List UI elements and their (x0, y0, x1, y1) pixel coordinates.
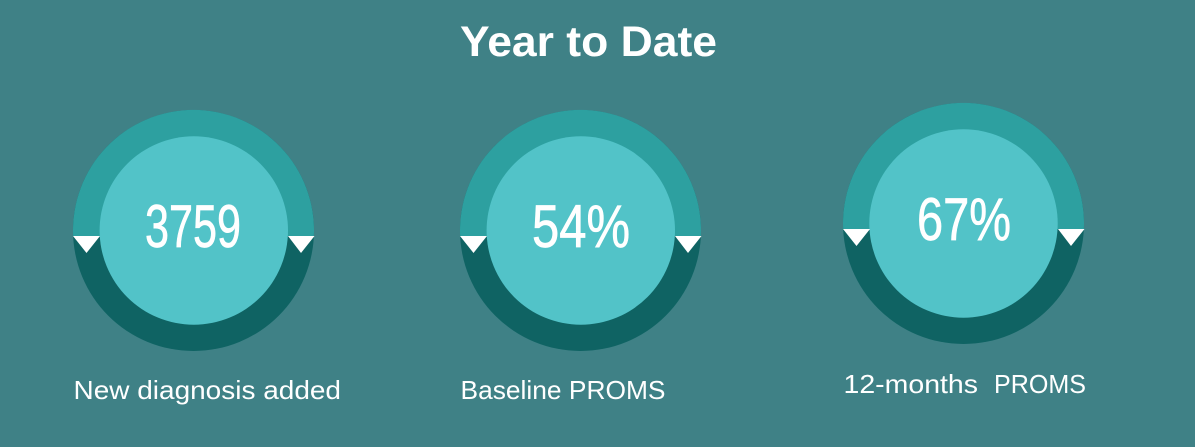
panel: baseline PROMS (460, 110, 702, 405)
value: 54%: 54% (532, 193, 630, 260)
label: 12-months PROMS: PROMS (994, 369, 1086, 399)
gauge: new diagnosis (73, 110, 314, 351)
title: Year to Date (460, 18, 717, 66)
gauge: 12-months (843, 103, 1084, 344)
value: 3759: 3759 (145, 193, 241, 260)
label: 12-months PROMS (844, 369, 1086, 399)
gauge: baseline (460, 110, 702, 351)
label: baseline PROMS: Baseline PROMS (460, 375, 666, 405)
value: 67%: 67% (917, 186, 1011, 253)
label: new diagnosis added: New diagnosis added (74, 375, 341, 405)
panel: new diagnosis added (73, 110, 341, 405)
panel: 12-months PROMS (843, 103, 1086, 399)
label: 12-months PROMS: 12-months (844, 369, 978, 399)
